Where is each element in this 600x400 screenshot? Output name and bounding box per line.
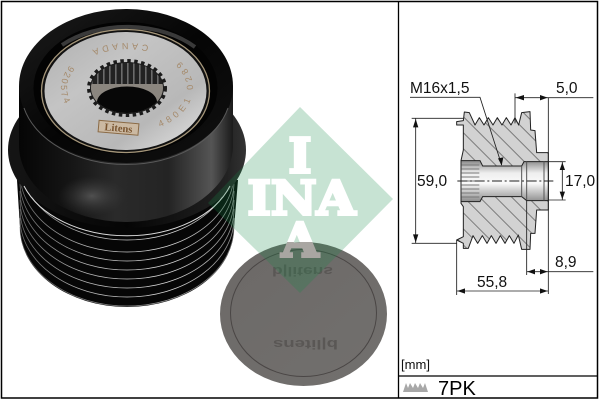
dimension labels: 59,0 [417,173,448,190]
dimension labels: 8,9 [555,254,577,271]
INA letters [248,128,356,226]
central bore [461,161,548,202]
dimension labels: M16x1,5 [410,80,469,97]
recess [34,22,218,154]
Litens badge [98,120,139,136]
dimension labels: 5,0 [556,80,578,97]
INA logo diamond [208,107,393,293]
flange highlight [24,186,230,236]
grooved belt section [17,161,238,307]
centre line [457,179,553,182]
internal spline [462,165,479,197]
dimension labels: 55,8 [477,274,507,291]
lower flange [8,72,246,228]
panel: technical drawing dividers [398,1,597,398]
rim lower edge highlight [24,108,228,164]
dimension labels: 17,0 [565,173,596,190]
inner ring [230,250,376,376]
recess highlight [62,27,195,47]
stamped markings [60,42,194,126]
section drawing [410,93,593,295]
INA logo lower letter: A [280,214,319,268]
spline interior [91,63,163,113]
embossed mark bottom: b|litens [273,337,338,352]
stamped markings: 480E1 0289 [159,62,194,126]
dimension arrows [413,95,565,294]
cylinder body [19,86,233,222]
icon: V-ribbed belt profile [403,383,428,392]
product photo: pulley [8,9,246,307]
bore details [522,162,544,201]
hatched pulley section [457,112,548,249]
stamped markings: CANADA [92,42,148,55]
silver bearing face [44,32,206,150]
belt profile label: 7PK [438,378,476,400]
stamped markings: 920574 [60,66,74,103]
spline teeth [90,62,164,114]
Litens badge: Litens [104,122,133,136]
cap disc [220,242,387,386]
embossed mark top: b|litens [272,264,333,279]
dimension lines [410,93,593,295]
dimension labels [410,80,596,291]
unit label: [mm] [401,357,430,372]
outer rim [19,9,233,163]
body soft reflection [58,176,126,216]
INA letters: I [288,128,312,184]
INA letters: INA [248,172,356,226]
tan seal ring [42,30,210,152]
